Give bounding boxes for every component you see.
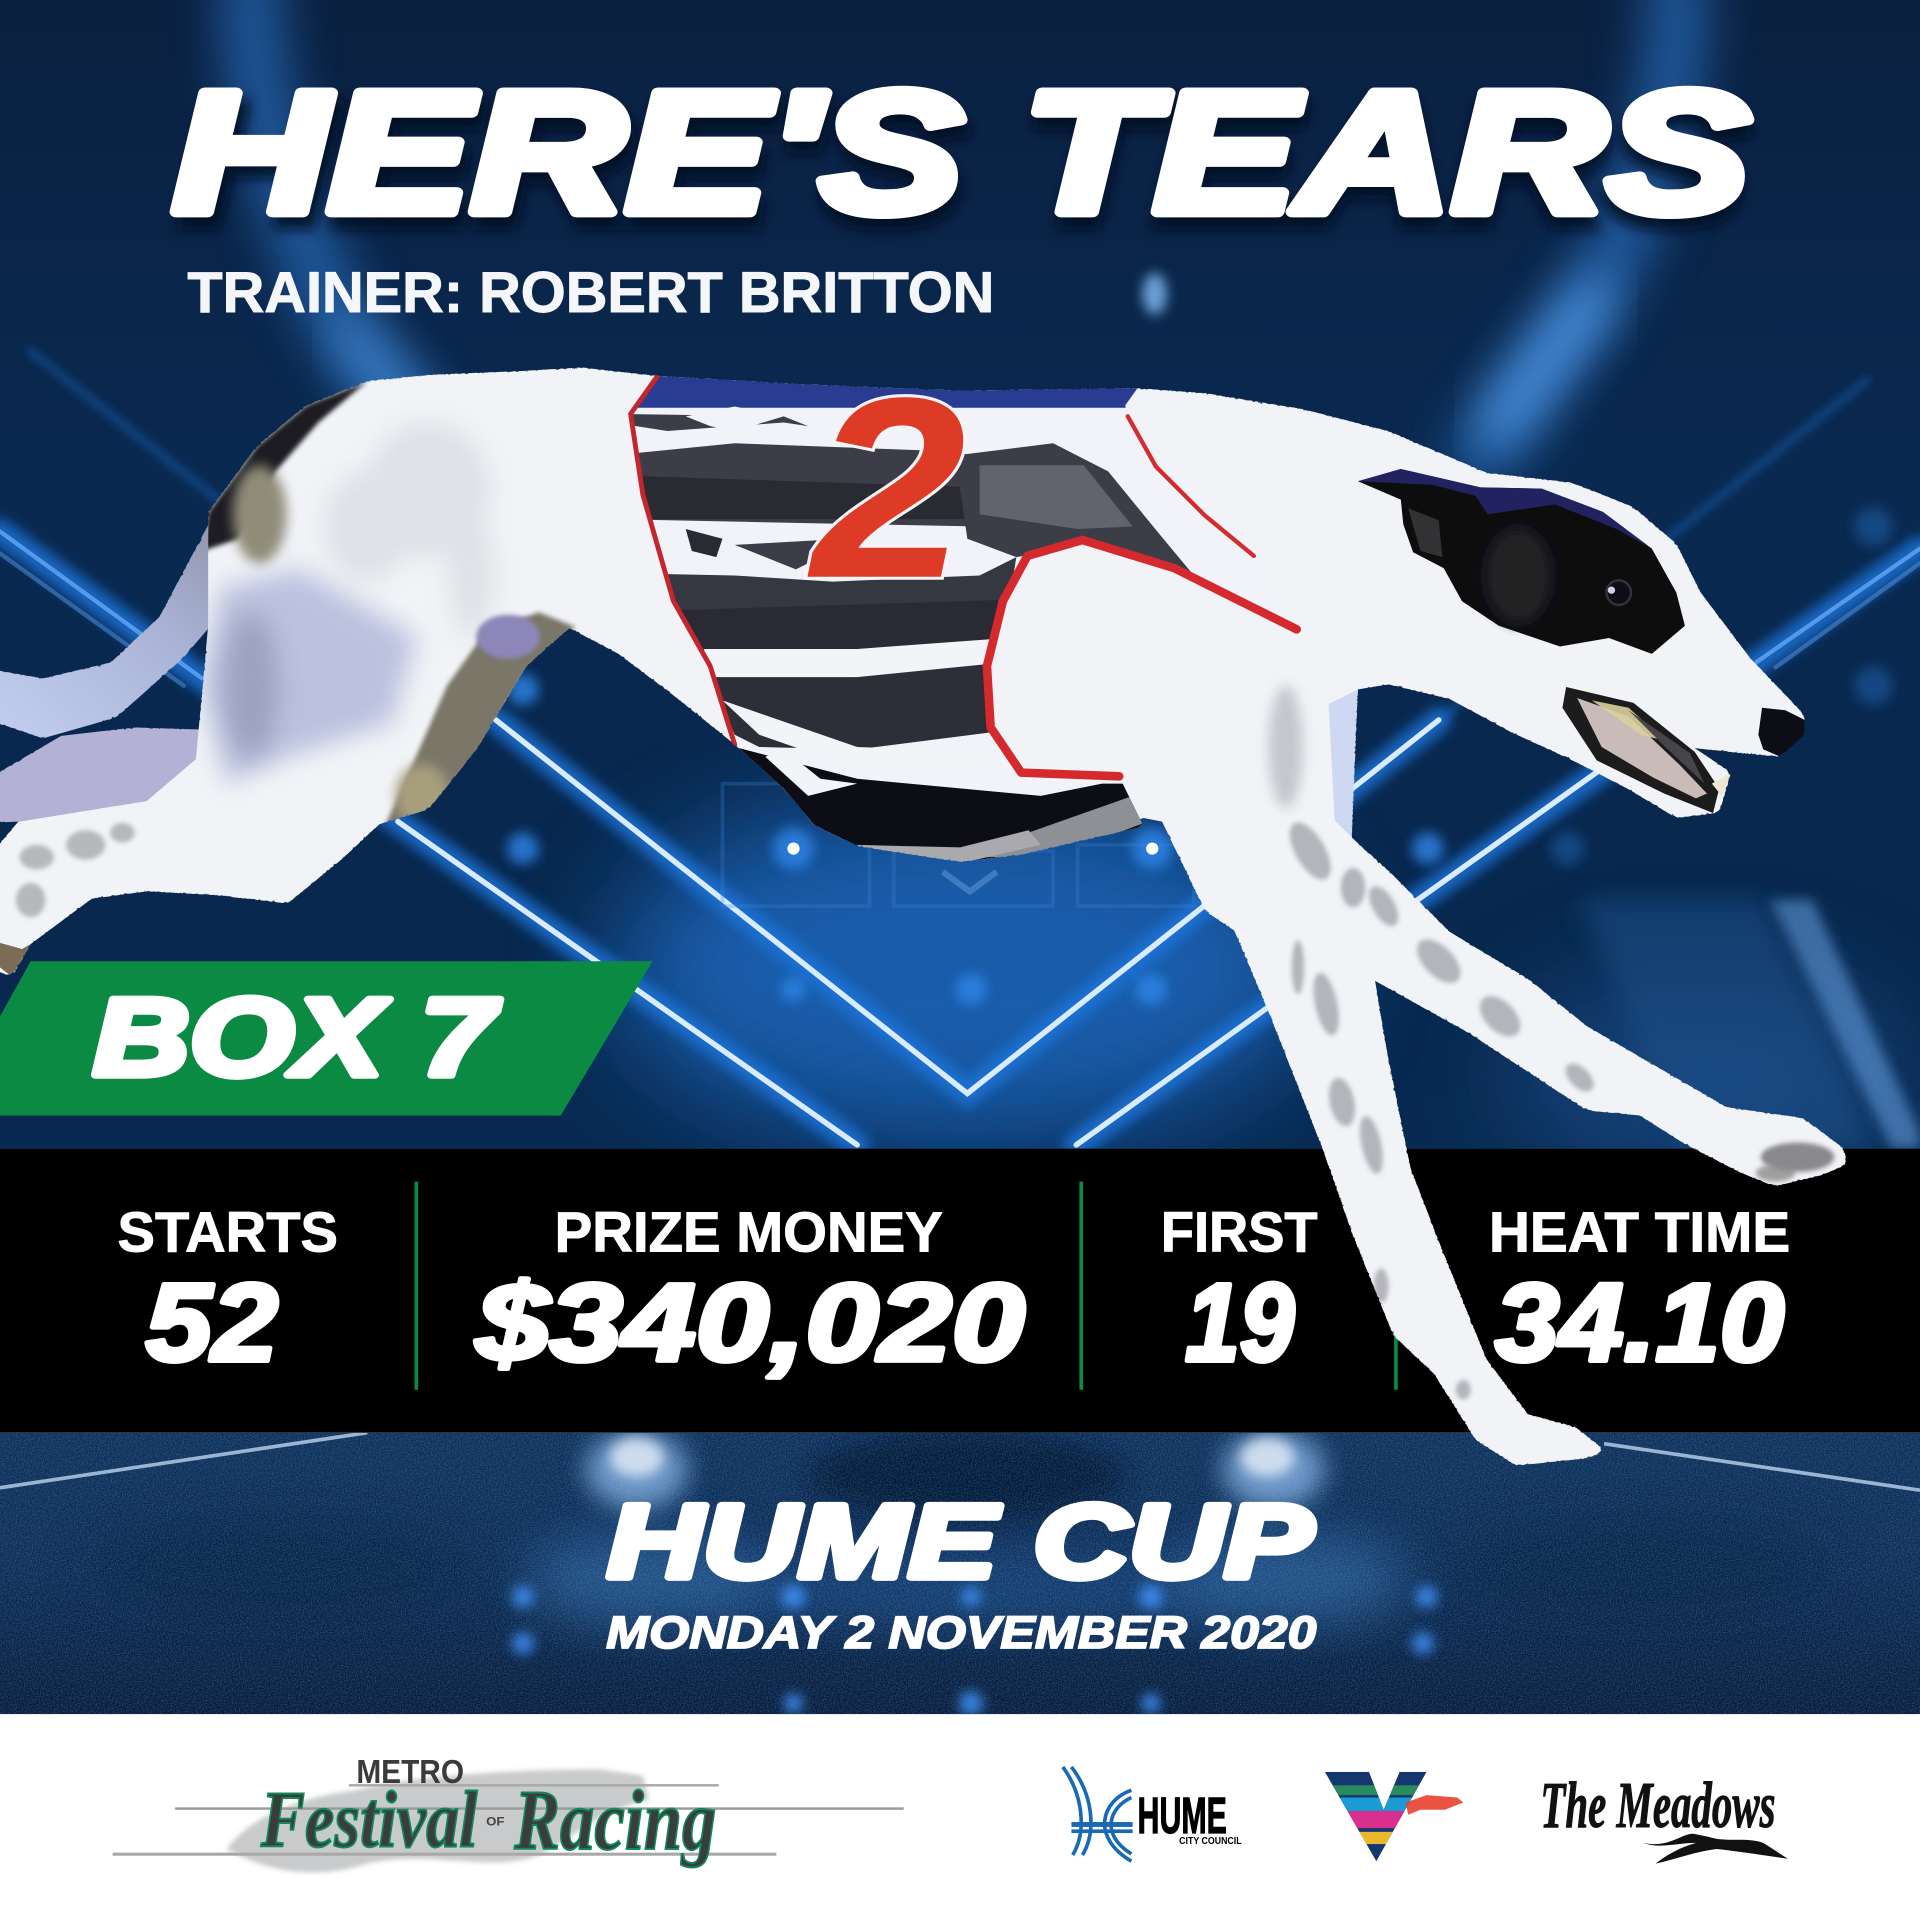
logo: hume city council: CITY COUNCIL xyxy=(1179,1836,1242,1847)
logo: the meadows xyxy=(1540,1769,1788,1864)
racing blanket xyxy=(612,345,1298,869)
box number banner xyxy=(0,961,653,1116)
trainer line: TRAINER: ROBERT BRITTON xyxy=(187,261,994,325)
fur shading and markings xyxy=(0,381,1834,1400)
stage beams curving down from the top xyxy=(251,0,1678,453)
stat: starts: 52 xyxy=(146,1261,278,1384)
stats band xyxy=(0,1149,1920,1433)
far hind foot xyxy=(0,727,208,823)
right side light panel xyxy=(1769,900,1920,1149)
logo: metro festival of racing: Festival xyxy=(260,1776,478,1865)
logo: metro festival of racing: METRO xyxy=(356,1754,464,1791)
head: black patch and ear xyxy=(1358,469,1805,813)
stat: prize money xyxy=(475,1200,1025,1384)
floor: wet reflective track xyxy=(0,1430,1920,1716)
logo: hume city council: HUME xyxy=(1138,1786,1227,1844)
title: dog name: HERE'S TEARS xyxy=(173,56,1750,249)
stat: starts: STARTS xyxy=(118,1200,338,1263)
stat: first xyxy=(1161,1200,1318,1384)
stage light spots xyxy=(507,273,1893,1005)
logo: hume city council xyxy=(1063,1767,1242,1861)
stat: heat time: HEAT TIME xyxy=(1489,1200,1790,1263)
tail xyxy=(0,520,235,738)
logo: metro festival of racing: Racing xyxy=(513,1773,716,1868)
greyhound xyxy=(0,345,1848,1466)
blanket number: 2 xyxy=(808,345,966,632)
event date: MONDAY 2 NOVEMBER 2020 xyxy=(606,1607,1316,1658)
box number banner: BOX 7 xyxy=(93,976,500,1099)
logo: the meadows: The Meadows xyxy=(1540,1769,1776,1842)
stat: starts xyxy=(118,1200,338,1384)
eye xyxy=(1607,580,1631,605)
stat: first: 19 xyxy=(1185,1261,1294,1384)
background: stage with neon lights xyxy=(0,0,1920,1176)
logo: metro festival of racing xyxy=(113,1754,904,1872)
mouth xyxy=(1562,687,1719,813)
stat: prize money: $340,020 xyxy=(475,1261,1025,1384)
stat: first: FIRST xyxy=(1161,1200,1318,1263)
event name: HUME CUP xyxy=(607,1484,1313,1600)
body silhouette xyxy=(0,367,1848,1466)
stat: prize money: PRIZE MONEY xyxy=(555,1200,943,1263)
nose xyxy=(1758,708,1805,757)
stat: heat time xyxy=(1489,1200,1790,1384)
logo: V emblem xyxy=(1322,1769,1463,1865)
title shadow: HERE'S TEARS xyxy=(180,68,1747,261)
stat: heat time: 34.10 xyxy=(1495,1261,1784,1384)
neon V lines xyxy=(0,351,1920,1145)
logo: metro festival of racing: OF xyxy=(486,1815,505,1829)
sponsor strip xyxy=(0,1714,1920,1875)
faint square panels xyxy=(722,784,1194,906)
